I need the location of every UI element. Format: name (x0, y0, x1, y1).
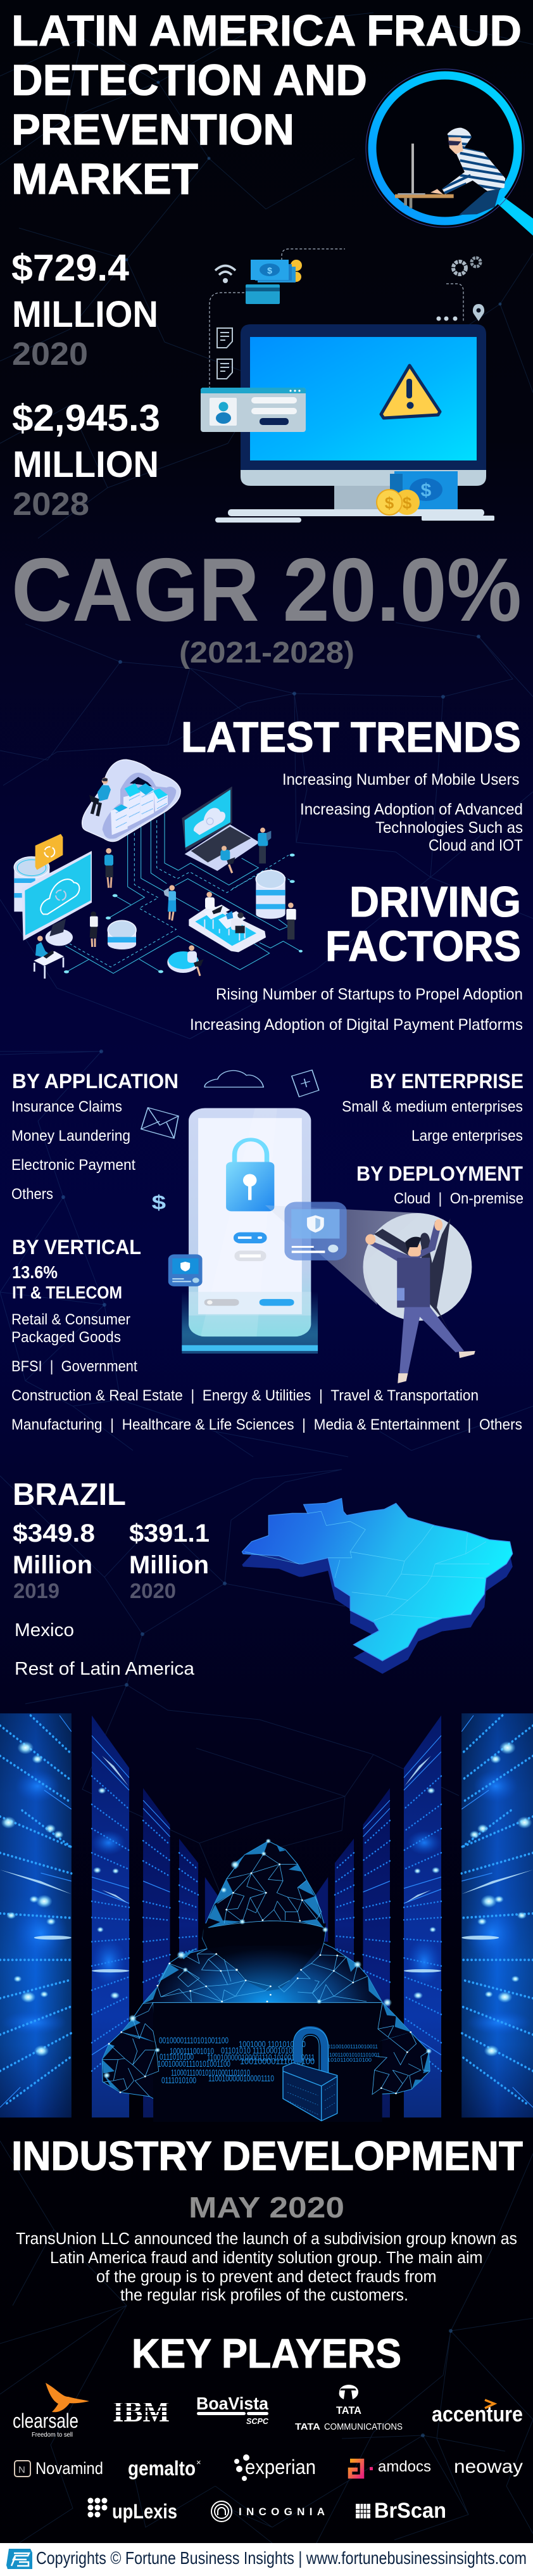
stat: 2028 market size (12, 397, 160, 522)
panel: Brazil values: Mexico (15, 1620, 74, 1640)
binary data text (158, 2035, 380, 2085)
icon: laptop (182, 787, 271, 873)
date: May 2020: MAY 2020 (189, 2191, 344, 2224)
text block: industry development description: of the group is to prevent and detect frauds from (96, 2268, 437, 2286)
illustration: hacker low-poly silhouette (102, 1839, 432, 2122)
text block: latest trends list: Increasing Number of Mobile Users (282, 771, 519, 789)
panel: Brazil values: BRAZIL (13, 1478, 126, 1512)
logo: Tata Communications: TATA (336, 2404, 361, 2416)
icon: cloud servers (111, 784, 168, 835)
text block: industry development description: the regular risk profiles of the customers. (120, 2287, 408, 2304)
icon: padlock (283, 2028, 337, 2121)
panel: by vertical: Construction & Real Estate | Energy & Utilities | Travel & Transportation (11, 1387, 479, 1404)
panel: by enterprise: Large enterprises (411, 1127, 523, 1145)
panel: by vertical: IT & TELECOM (12, 1283, 122, 1302)
binary data text: 10101100110100 (327, 2057, 372, 2063)
map: Brazil (242, 1499, 513, 1674)
text block: industry development description: TransUnion LLC announced the launch of a subdivision group known as (16, 2230, 517, 2248)
icon: computer with warning and fraud symbols (201, 249, 494, 523)
heading: latest trends: LATEST TRENDS (181, 713, 521, 761)
icon: computer with warning and fraud symbols: $ (421, 480, 432, 501)
binary data text: 1001000 1101010010 (239, 2039, 306, 2049)
illustration: phone security with person (141, 1070, 475, 1383)
binary data text: 1000111001010 (170, 2046, 214, 2056)
icon: computer with warning and fraud symbols: $ (267, 265, 272, 276)
binary data text: 00100001110101001100 (159, 2035, 229, 2045)
icon: large database, folder and monitor (14, 834, 92, 946)
panel: Brazil values: Million (13, 1551, 92, 1579)
illustration: server corridor (0, 1713, 533, 2117)
title: DETECTION AND (11, 56, 367, 105)
icon: seated man on cloud (89, 778, 111, 816)
heading: driving factors: DRIVING (349, 878, 521, 926)
CAGR headline: (2021-2028) (179, 635, 354, 669)
panel: by application: Money Laundering (11, 1127, 130, 1145)
logo: Tata Communications: TATA (295, 2421, 320, 2432)
icon: standing people (34, 848, 296, 979)
stat: 2028 market size: 2028 (13, 486, 89, 522)
icon: computer with warning and fraud symbols: $ (385, 493, 394, 512)
logo: amdocs: amdocs (378, 2458, 431, 2475)
text block: driving factors list: Rising Number of Startups to Propel Adoption (216, 986, 523, 1003)
panel: Brazil values: Million (129, 1551, 209, 1579)
logo: BoaVista (196, 2394, 269, 2426)
illustration: phone security with person: $ (152, 1191, 166, 1214)
stat: 2028 market size: $2,945.3 (12, 397, 160, 439)
panel: Brazil values: Rest of Latin America (15, 1659, 195, 1679)
logo: clearsale: Freedom to sell (32, 2432, 73, 2439)
text block: latest trends list: Technologies Such as (375, 819, 523, 837)
panel: by deployment (356, 1162, 524, 1207)
panel: by vertical: Packaged Goods (11, 1329, 121, 1346)
panel: by application: BY APPLICATION (12, 1070, 179, 1093)
text block: driving factors list: Increasing Adoption of Digital Payment Platforms (190, 1016, 523, 1034)
logo: Incognia: INCOGNIA (239, 2506, 325, 2518)
text block: latest trends list (282, 771, 523, 854)
text block: industry development description (16, 2230, 517, 2304)
panel: Brazil values: $349.8 (13, 1520, 95, 1547)
panel: by vertical: BFSI | Government (11, 1358, 137, 1375)
panel: Brazil values: 2020 (130, 1579, 176, 1602)
logo: clearsale (13, 2383, 89, 2439)
stat: 2020 market size (11, 247, 158, 372)
text block: latest trends list: Increasing Adoption of Advanced (300, 801, 523, 818)
logo: gemalto: gemalto (128, 2457, 196, 2480)
binary data text: 100100001110101001100 (158, 2059, 230, 2069)
logo: Tata Communications (295, 2385, 403, 2432)
logo: BrScan: BrScan (374, 2499, 446, 2523)
title: LATIN AMERICA FRAUD (11, 6, 522, 55)
logo: experian: experian (245, 2456, 316, 2478)
binary data text: 1100100000100001110 (208, 2073, 274, 2083)
stat: 2028 market size: MILLION (13, 444, 159, 485)
logo: clearsale: clearsale (13, 2409, 78, 2432)
logo: Novamind (15, 2459, 103, 2478)
panel: by deployment: BY DEPLOYMENT (356, 1162, 523, 1185)
heading: driving factors (325, 878, 521, 970)
stat: 2020 market size: 2020 (12, 336, 88, 372)
icon: magnifier with hacker (366, 69, 533, 236)
heading: driving factors: FACTORS (325, 922, 521, 970)
heading: industry development: INDUSTRY DEVELOPMENT (11, 2133, 523, 2179)
panel: by enterprise (342, 1070, 524, 1145)
binary data text: 011001001110010011 (327, 2044, 379, 2050)
logo: Novamind: Novamind (35, 2459, 103, 2478)
logo: BoaVista: SCPC (246, 2416, 269, 2426)
title (11, 6, 522, 203)
binary data text: 1100100000100001110 101001100011 (207, 2052, 315, 2062)
panel: Brazil values: 2019 (13, 1579, 60, 1602)
binary data text: 0111010100 (161, 2075, 196, 2085)
binary data text: 100110010101101001 (329, 2052, 380, 2058)
panel: by application: Electronic Payment (11, 1157, 135, 1174)
logo: gemalto: × (196, 2458, 201, 2467)
binary data text: 10010000111010100 (240, 2056, 315, 2066)
logo: IBM: IBM (113, 2395, 170, 2428)
logo: amdocs (350, 2458, 431, 2477)
panel: by enterprise: BY ENTERPRISE (370, 1070, 524, 1093)
panel: by deployment: Cloud | On-premise (394, 1190, 524, 1207)
logo: upLexis: upLexis (112, 2500, 177, 2523)
binary data text: 1100011100101010001101010 (171, 2067, 250, 2078)
logo: accenture: accenture (432, 2402, 523, 2427)
stat: 2020 market size: MILLION (12, 294, 158, 335)
text block: industry development description: Latin America fraud and identity solution group. The main aim (50, 2249, 482, 2267)
logo: Tata Communications: COMMUNICATIONS (324, 2421, 403, 2432)
panel: by application (11, 1070, 179, 1203)
panel: by vertical (11, 1236, 522, 1433)
title: MARKET (11, 155, 198, 203)
icon: phone with team (189, 892, 266, 952)
panel: Brazil values: $391.1 (129, 1520, 210, 1547)
logo: Novamind: N (18, 2465, 25, 2475)
title: PREVENTION (11, 105, 294, 154)
heading: key players: KEY PLAYERS (132, 2330, 401, 2376)
panel: by application: Others (11, 1186, 53, 1203)
icon: Fortune Business Insights logo (6, 2549, 32, 2569)
text block: driving factors list (190, 986, 523, 1034)
binary data text: 01101010 1111000101001 (221, 2045, 300, 2055)
binary data text: 0111010100 (160, 2052, 194, 2062)
footer bar (0, 2543, 533, 2576)
panel: by vertical: Retail & Consumer (11, 1311, 130, 1328)
panel: by vertical: 13.6% (12, 1262, 58, 1282)
logo: BoaVista: BoaVista (196, 2394, 268, 2413)
text block: latest trends list: Cloud and IOT (429, 837, 523, 854)
logo: upLexis (87, 2498, 177, 2523)
icon: databases (108, 870, 285, 973)
panel: Brazil values (13, 1478, 210, 1679)
icon: computer with warning and fraud symbols: $ (403, 493, 412, 512)
illustration: isometric cloud network (14, 759, 303, 979)
panel: by enterprise: Small & medium enterprises (342, 1098, 523, 1115)
stat: 2020 market size: $729.4 (11, 247, 129, 289)
logo: Incognia (211, 2501, 325, 2522)
logo: experian (234, 2454, 316, 2481)
panel: by vertical: BY VERTICAL (12, 1236, 141, 1259)
logo: neoway: neoway (454, 2456, 523, 2477)
panel: by application: Insurance Claims (11, 1098, 122, 1115)
